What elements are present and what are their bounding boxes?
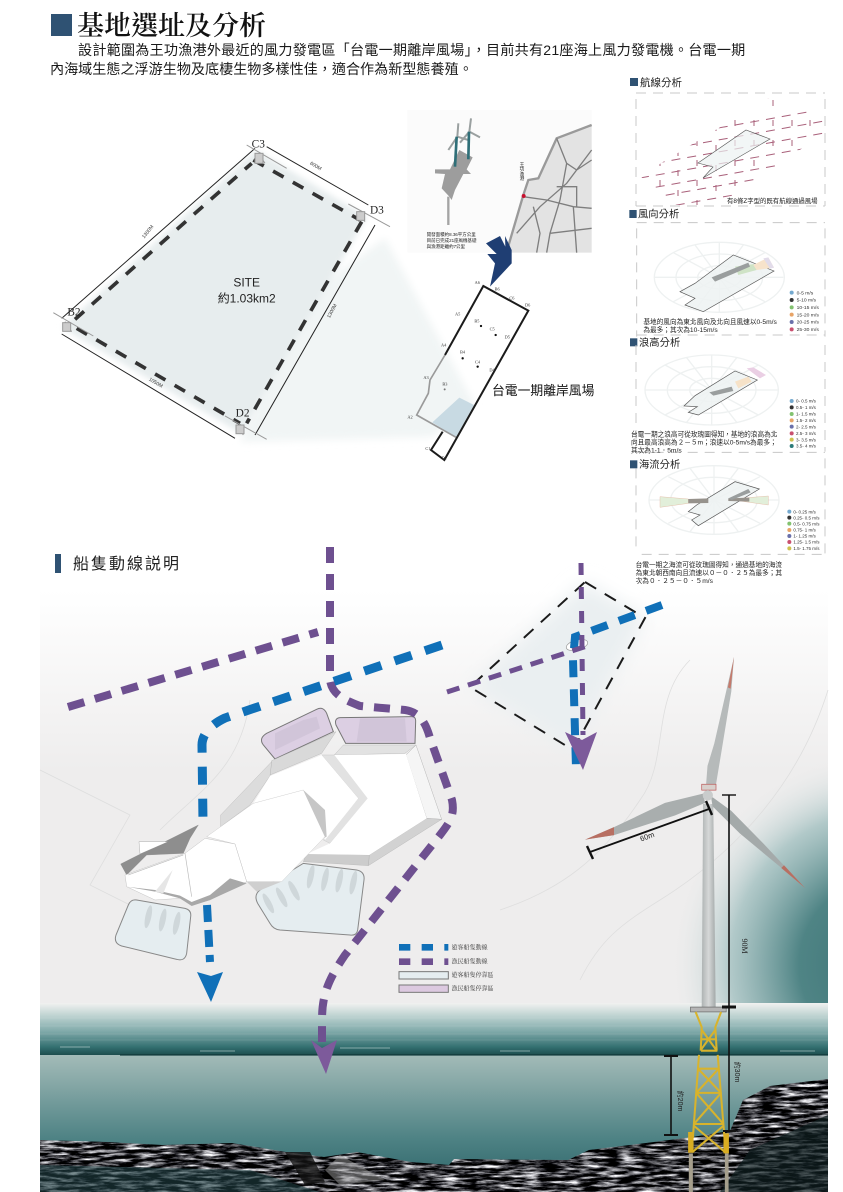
caption: 次為０．２５－０．５m/s xyxy=(636,576,714,585)
turbine labels: D1 xyxy=(442,455,447,460)
dimension labels: 約20m xyxy=(676,1091,685,1111)
dimension labels: 約30m xyxy=(733,1062,742,1082)
moored boats xyxy=(143,864,359,935)
legend xyxy=(787,509,820,551)
location map: 功 xyxy=(520,166,525,173)
site label: SITE xyxy=(233,276,260,290)
dimension labels xyxy=(141,161,339,390)
panel: wind direction xyxy=(629,208,825,337)
legend xyxy=(790,290,819,333)
site label: 約1.03km2 xyxy=(218,290,276,305)
caption: 台電一期之浪高可從玫瑰圖得知，基地的浪高為北 xyxy=(631,430,778,439)
small site inset xyxy=(470,582,645,750)
dimensions: turbine xyxy=(587,795,736,1135)
land xyxy=(505,125,592,253)
map note: 與漁港距離約7公里 xyxy=(427,243,466,250)
legend: 3.5- 4 m/s xyxy=(796,444,817,449)
panel: wave height: 浪高分析 xyxy=(639,336,680,349)
location map xyxy=(407,110,592,253)
jacket foundation xyxy=(693,1012,724,1152)
turbine labels: C5 xyxy=(490,326,495,331)
corner labels xyxy=(67,138,384,420)
legend: 0- 0.5 m/s xyxy=(796,399,817,404)
rose chart xyxy=(645,355,778,425)
legend: 1- 1.5 m/s xyxy=(796,412,817,417)
mini turbines xyxy=(448,118,480,150)
corner labels: C3 xyxy=(252,138,265,150)
legend: 25-30 m/s xyxy=(797,327,819,333)
legend: 10-15 m/s xyxy=(797,305,819,311)
heading: vessel routes: 船隻動線説明 xyxy=(73,555,181,573)
turbine labels: C1 xyxy=(425,446,430,451)
site plan xyxy=(53,138,390,439)
legend: vessel routes: 遊客船隻停靠區 xyxy=(452,971,494,979)
corner turbines xyxy=(53,145,390,439)
rose chart xyxy=(654,242,784,312)
caption xyxy=(631,430,778,455)
legend: 20-25 m/s xyxy=(797,320,819,326)
dimension labels: 1300M xyxy=(141,224,155,240)
legend: 1.5- 1.75 m/s xyxy=(793,546,820,551)
caption: 為最多；其次為10-15m/s xyxy=(643,325,718,334)
corner labels: D2 xyxy=(236,408,250,420)
turbine labels: B5 xyxy=(474,318,479,323)
legend: 0.5- 0.75 m/s xyxy=(793,521,820,526)
panel: sea current: 海流分析 xyxy=(639,458,680,471)
turbine labels: D4 xyxy=(489,368,495,373)
seabed rocks xyxy=(40,1079,828,1192)
dimension labels: 90M xyxy=(740,938,749,954)
intro text: 內海域生態之浮游生物及底棲生物多樣性佳，適合作為新型態養殖。 xyxy=(50,61,473,77)
route: fishing boats west xyxy=(68,632,318,707)
map note: 目前已完成21座風機基礎 xyxy=(427,237,477,244)
roads xyxy=(517,138,592,253)
caption: 其次為1-1．5m/s xyxy=(631,446,682,455)
farm footprint icon xyxy=(435,150,473,200)
panel: route analysis: 有8條Z字型的既有航線通過風場 xyxy=(727,196,818,205)
turbine labels: A4 xyxy=(441,343,447,348)
location map: 漁 xyxy=(520,170,525,177)
turbine labels: B4 xyxy=(460,349,466,354)
panel: sea current xyxy=(630,458,825,585)
location map: 王 xyxy=(520,162,525,167)
turbine labels: D6 xyxy=(525,303,531,308)
turbine labels: A2 xyxy=(407,414,413,419)
wind farm label: 台電一期離岸風場 xyxy=(492,383,595,398)
dimension labels xyxy=(639,830,749,1111)
arrow: navy swoosh xyxy=(486,236,512,287)
harbor marker xyxy=(522,194,526,198)
caption: 基地的風向為東北風向及北向且風速以0-5m/s xyxy=(643,317,778,326)
legend: 5-10 m/s xyxy=(797,298,817,304)
wind farm outline xyxy=(407,280,531,460)
turbine labels: C6 xyxy=(509,295,515,300)
arrow: visitor boats xyxy=(197,972,223,1002)
site label xyxy=(218,276,276,305)
intro text xyxy=(50,42,746,77)
caption: 台電一期之海流可從玫瑰圖得知，通過基地的海流 xyxy=(636,560,782,569)
legend: 0.25- 0.5 m/s xyxy=(793,515,820,520)
legend: 1.5- 2 m/s xyxy=(796,418,817,423)
wind turbine xyxy=(585,657,805,1192)
legend: vessel routes: 遊客船隻動線 xyxy=(452,943,488,951)
parking: visitor boats xyxy=(256,863,364,935)
selected area xyxy=(432,398,474,437)
rose chart xyxy=(649,466,779,534)
tower xyxy=(702,804,716,1007)
building plan xyxy=(115,708,442,960)
corner labels: B2 xyxy=(67,306,81,318)
turbine labels xyxy=(407,280,531,460)
white masses xyxy=(307,754,427,855)
panel: route analysis: 航線分析 xyxy=(640,76,682,89)
map note xyxy=(427,231,477,250)
existing routes xyxy=(641,98,822,205)
routes through inset xyxy=(447,563,662,770)
nacelle xyxy=(702,784,716,790)
dimension labels: 60m xyxy=(639,830,656,843)
legend: 2.5- 3 m/s xyxy=(796,431,817,436)
turbine labels: D5 xyxy=(505,334,510,339)
title: 基地選址及分析 xyxy=(77,11,266,41)
route: visitor boats xyxy=(202,645,442,822)
turbine labels: A5 xyxy=(455,312,460,317)
building walls xyxy=(270,732,336,775)
caption xyxy=(643,317,778,334)
turbine labels: B6 xyxy=(495,287,501,292)
location map: 港 xyxy=(520,175,525,182)
legend: 1.25- 1.5 m/s xyxy=(793,540,820,545)
legend: 1- 1.25 m/s xyxy=(793,534,817,539)
panel: sea background xyxy=(40,590,828,1192)
panel: wind direction: 風向分析 xyxy=(638,208,679,221)
legend: 15-20 m/s xyxy=(797,312,819,318)
route: fishing boats main xyxy=(322,547,453,1042)
arrow: inset xyxy=(565,732,597,770)
dimension labels: 1050M xyxy=(147,377,164,390)
legend: vessel routes: 漁民船隻停靠區 xyxy=(452,984,494,992)
site outline xyxy=(698,130,770,178)
platform xyxy=(690,1007,726,1012)
corner labels: D3 xyxy=(370,204,384,216)
dimension labels: 600M xyxy=(309,161,322,172)
blades xyxy=(706,657,734,788)
turbine labels: B3 xyxy=(442,381,447,386)
panel: wave height xyxy=(630,336,825,455)
turbine labels: A6 xyxy=(475,280,481,285)
dimension labels: 1300M xyxy=(326,303,339,319)
turbine labels: A3 xyxy=(423,375,429,380)
map note: 開發面積約8.36平方公里 xyxy=(427,231,476,238)
wedge linking site to wind farm xyxy=(240,238,475,442)
legend: 3- 3.5 m/s xyxy=(796,437,817,442)
legend xyxy=(790,399,817,449)
legend: 0.75- 1 m/s xyxy=(793,528,817,533)
caption: 向且最高浪高為２－５m；浪速以0-5m/s為最多； xyxy=(631,438,777,447)
caption: 為東北朝西南向且流速以０－０．２５為最多；其 xyxy=(636,568,782,577)
legend: 0- 0.25 m/s xyxy=(793,509,817,514)
parking: fishing boats xyxy=(261,708,333,759)
legend: 0.5- 1 m/s xyxy=(796,405,817,410)
caption xyxy=(636,560,782,585)
legend: vessel routes xyxy=(399,943,494,992)
legend: 2- 2.5 m/s xyxy=(796,424,817,429)
intro text: 設計範圍為王功漁港外最近的風力發電區「台電一期離岸風場」，目前共有21座海上風力發電機。台電一期 xyxy=(78,42,746,58)
turbine labels: C4 xyxy=(475,360,481,365)
legend: vessel routes: 漁民船隻動線 xyxy=(452,958,488,966)
panel: route analysis xyxy=(630,76,830,210)
arrow: fishing boats xyxy=(311,1040,337,1074)
legend: 0-5 m/s xyxy=(797,290,814,296)
